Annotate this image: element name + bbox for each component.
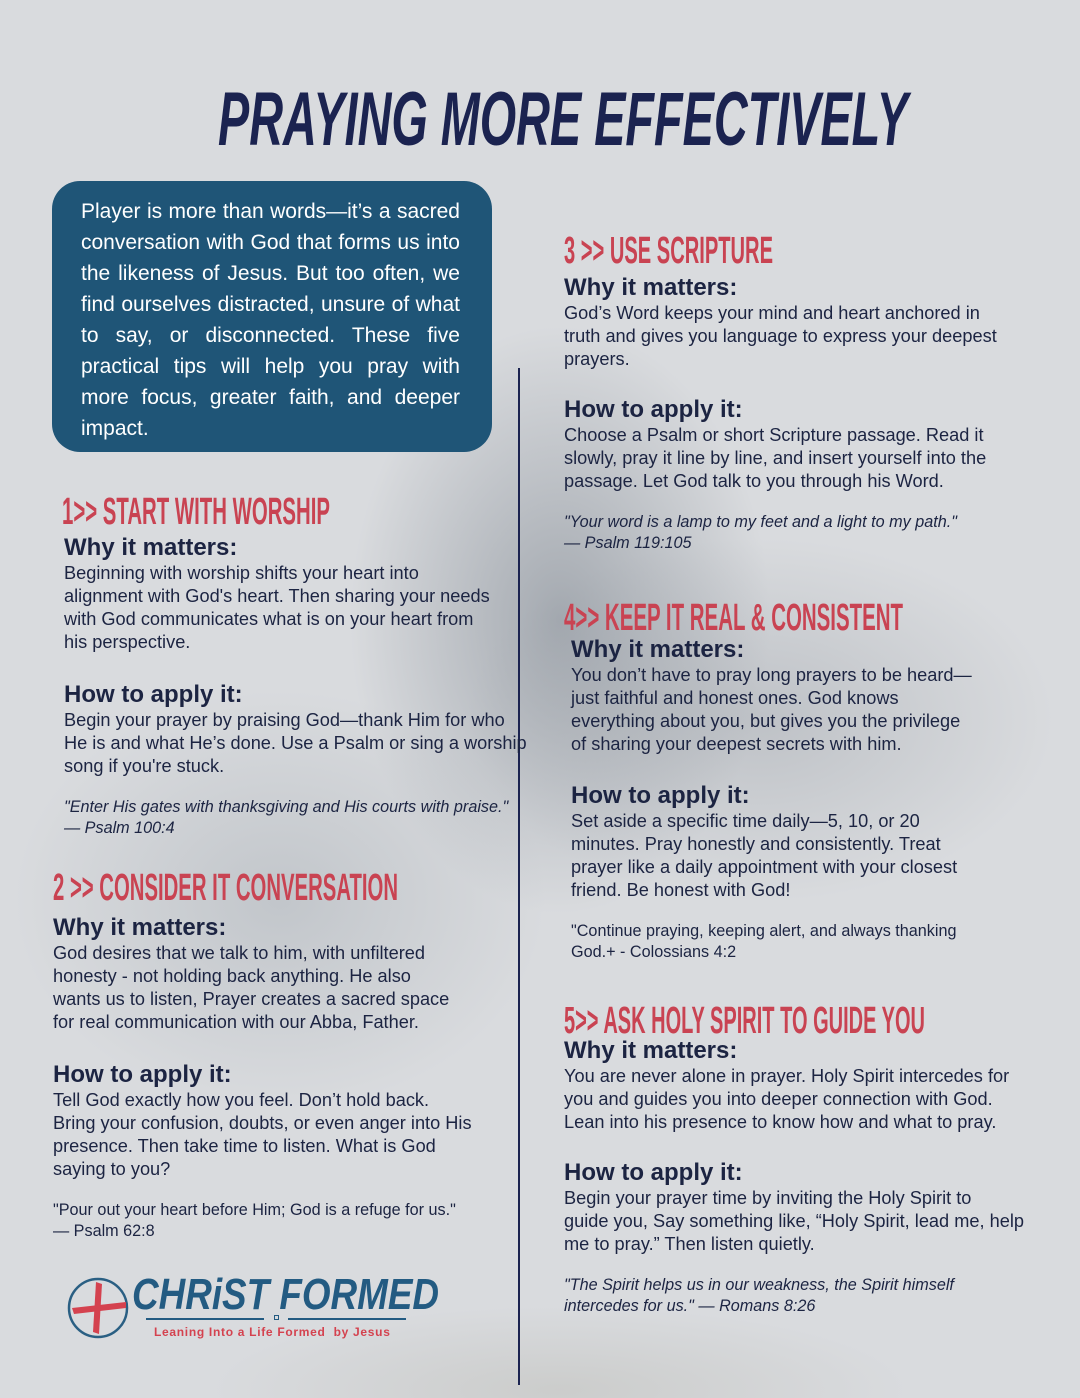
why 5: Lean into his presence to know how and what to pray. (564, 1112, 996, 1132)
how 2: presence. Then take time to listen. What is God (53, 1136, 436, 1156)
how 4: friend. Be honest with God! (571, 880, 790, 900)
how 2: How to apply it: (53, 1061, 232, 1088)
why 4: of sharing your deepest secrets with him. (571, 734, 902, 754)
how 5: Begin your prayer time by inviting the Holy Spirit to (564, 1188, 971, 1208)
why 2: God desires that we talk to him, with unfiltered (53, 943, 425, 963)
why 2: honesty - not holding back anything. He also (53, 966, 411, 986)
why 3 (564, 274, 997, 369)
quote 3 (564, 513, 958, 552)
how 1: He is and what He’s done. Use a Psalm or sing a worship (64, 733, 527, 753)
icon: cross circle (68, 1278, 128, 1338)
how 5: guide you, Say something like, “Holy Spirit, lead me, help (564, 1211, 1024, 1231)
why 2: Why it matters: (53, 914, 226, 941)
quote 2 (53, 1201, 456, 1240)
logo (68, 1270, 439, 1339)
quote 3: "Your word is a lamp to my feet and a light to my path." (564, 513, 957, 531)
how 3: Choose a Psalm or short Scripture passage. Read it (564, 425, 984, 445)
quote 2: — Psalm 62:8 (53, 1222, 155, 1240)
why 3: prayers. (564, 349, 630, 369)
heading 2: 2 >> CONSIDER IT CONVERSATION (53, 867, 398, 909)
how 5: How to apply it: (564, 1159, 743, 1186)
how 2 (53, 1061, 472, 1179)
how 3: How to apply it: (564, 396, 743, 423)
why 4: everything about you, but gives you the privilege (571, 711, 960, 731)
how 4 (571, 782, 958, 900)
why 1: alignment with God's heart. Then sharing your needs (64, 586, 490, 606)
why 4 (570, 636, 972, 754)
how 2: Bring your confusion, doubts, or even anger into His (53, 1113, 472, 1133)
quote 4 (571, 922, 956, 961)
why 1 (64, 534, 490, 652)
why 2: for real communication with our Abba, Father. (53, 1012, 419, 1032)
heading 3: 3 >> USE SCRIPTURE (564, 230, 773, 272)
tagline: Leaning Into a Life Formed by Jesus (154, 1325, 391, 1339)
quote 5: intercedes for us." — Romans 8:26 (564, 1297, 815, 1315)
quote 1 (64, 798, 509, 837)
how 1: How to apply it: (64, 681, 243, 708)
section 5 (564, 1000, 1024, 1315)
how 4: minutes. Pray honestly and consistently. Treat (571, 834, 941, 854)
quote 4: God.+ - Colossians 4:2 (571, 943, 736, 961)
why 5: Why it matters: (564, 1037, 737, 1064)
how 1 (64, 681, 527, 776)
how 1: song if you're stuck. (64, 756, 224, 776)
why 3: Why it matters: (564, 274, 737, 301)
how 4: How to apply it: (571, 782, 750, 809)
why 5: you and guides you into deeper connection with God. (564, 1089, 993, 1109)
how 3 (564, 396, 986, 491)
how 3: passage. Let God talk to you through his Word. (564, 471, 944, 491)
quote 2: "Pour out your heart before Him; God is a refuge for us." (53, 1201, 456, 1219)
quote 5 (564, 1276, 956, 1315)
heading 1: 1>> START WITH WORSHIP (62, 491, 330, 533)
why 2 (53, 914, 449, 1032)
why 4: just faithful and honest ones. God knows (571, 688, 899, 708)
why 3: truth and gives you language to express your deepest (564, 326, 997, 346)
logo text: CHRiST FORMED (132, 1270, 439, 1319)
section 2 (53, 867, 472, 1240)
why 2: wants us to listen, Prayer creates a sacred space (53, 989, 449, 1009)
why 5: You are never alone in prayer. Holy Spirit intercedes for (564, 1066, 1009, 1086)
intro box: Player is more than words—it’s a sacred conversation with God that forms us into the likeness of Jesus. But too often, we find ourselves distracted, unsure of what to say, or disconnected. These five practical tips will help you pray with more focus, greater faith, and deeper impact. (81, 200, 460, 440)
how 4: Set aside a specific time daily—5, 10, or 20 (571, 811, 920, 831)
quote 3: — Psalm 119:105 (564, 534, 691, 552)
how 5 (564, 1159, 1024, 1254)
why 1: Beginning with worship shifts your heart into (64, 563, 419, 583)
how 2: saying to you? (53, 1159, 170, 1179)
why 4: Why it matters: (571, 636, 744, 663)
why 5 (564, 1037, 1009, 1132)
section 4 (564, 597, 972, 961)
how 5: me to pray.” Then listen quietly. (564, 1234, 815, 1254)
why 1: his perspective. (64, 632, 190, 652)
quote 1: "Enter His gates with thanksgiving and His courts with praise." (64, 798, 508, 816)
divider line (518, 368, 520, 1385)
how 4: prayer like a daily appointment with your closest (571, 857, 957, 877)
why 1: with God communicates what is on your heart from (64, 609, 473, 629)
why 1: Why it matters: (64, 534, 237, 561)
why 3: God’s Word keeps your mind and heart anchored in (564, 303, 980, 323)
why 4: You don’t have to pray long prayers to be heard— (571, 665, 972, 685)
quote 1: — Psalm 100:4 (64, 819, 175, 837)
how 1: Begin your prayer by praising God—thank Him for who (64, 710, 505, 730)
section 3 (564, 230, 997, 552)
how 3: slowly, pray it line by line, and insert yourself into the (564, 448, 986, 468)
section 1 (62, 491, 527, 837)
quote 5: "The Spirit helps us in our weakness, the Spirit himself (564, 1276, 954, 1294)
quote 4: "Continue praying, keeping alert, and always thanking (571, 922, 956, 940)
how 2: Tell God exactly how you feel. Don’t hold back. (53, 1090, 429, 1110)
